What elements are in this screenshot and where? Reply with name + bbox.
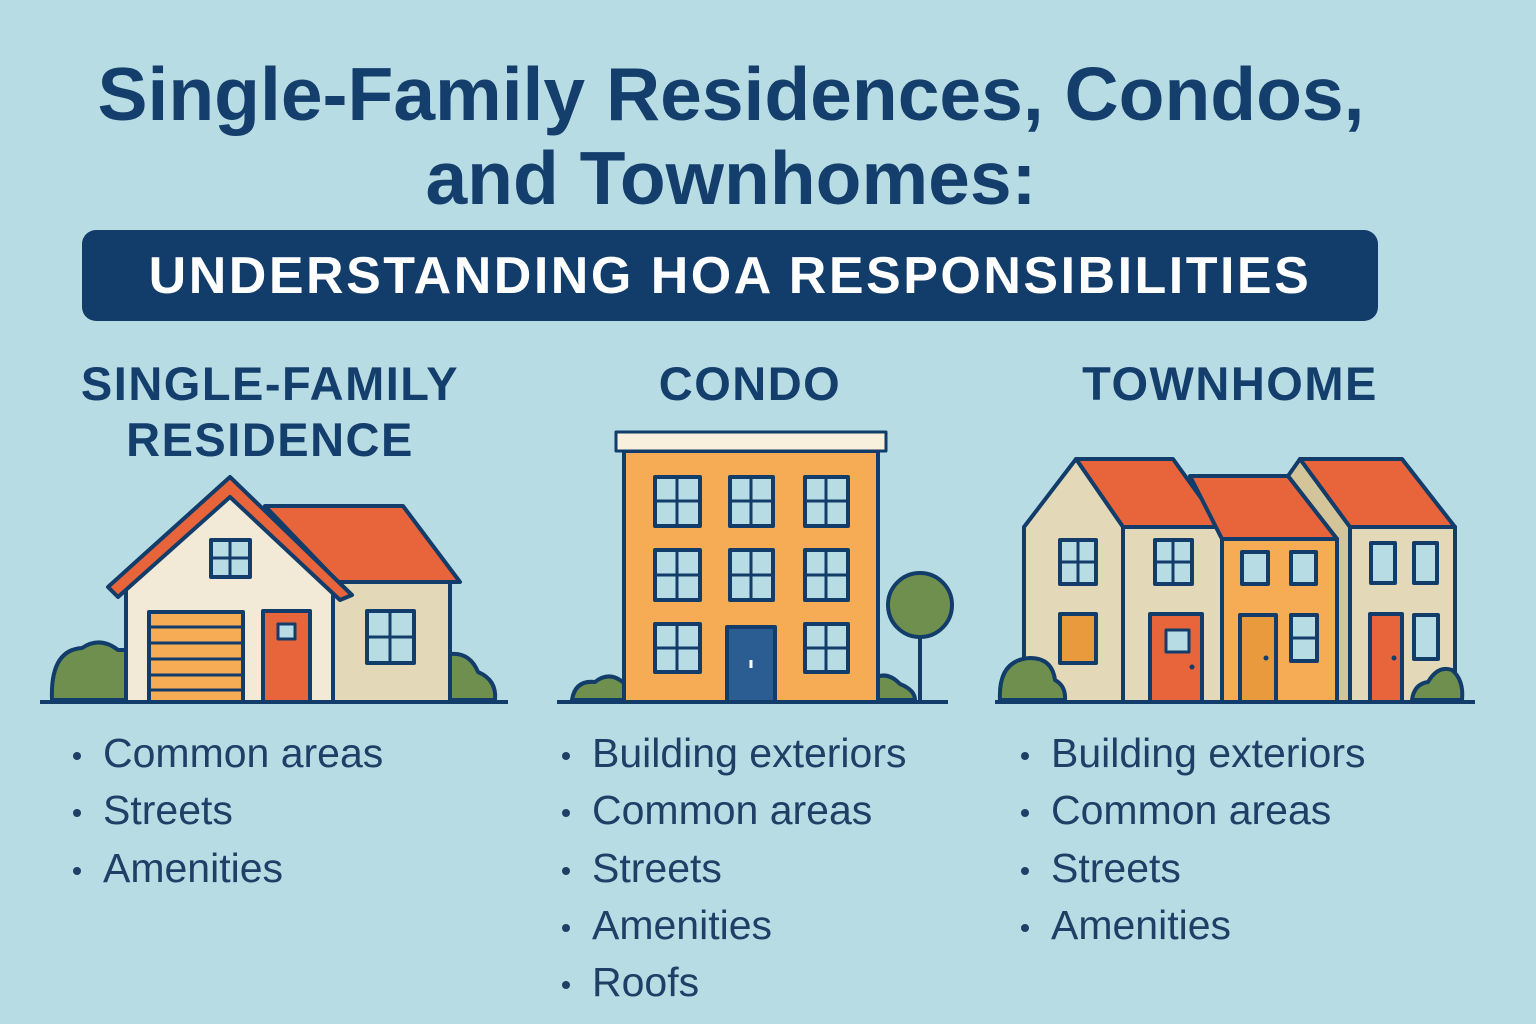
icon: condo building <box>557 432 952 702</box>
heading: condo: CONDO <box>659 357 841 410</box>
heading: townhome: TOWNHOME <box>1082 357 1378 410</box>
list: single-family: Amenities <box>103 845 283 891</box>
list: townhome: Common areas <box>1051 787 1331 833</box>
icon: single-family house <box>40 477 508 702</box>
list: townhome: Streets <box>1051 845 1181 891</box>
icon: townhomes <box>995 459 1475 702</box>
list: single-family: Streets <box>103 787 233 833</box>
banner: UNDERSTANDING HOA RESPONSIBILITIES <box>149 247 1311 305</box>
title: Single-Family Residences, Condos, <box>98 52 1364 136</box>
title <box>98 52 1364 220</box>
list: townhome: Building exteriors <box>1051 730 1366 776</box>
list: single-family <box>73 730 383 891</box>
list: condo <box>562 730 906 1005</box>
heading: single-family: SINGLE-FAMILY <box>81 357 459 410</box>
list: townhome <box>1021 730 1366 948</box>
list: condo: Amenities <box>592 902 772 948</box>
list: condo: Streets <box>592 845 722 891</box>
list: condo: Roofs <box>592 959 699 1005</box>
list: townhome: Amenities <box>1051 902 1231 948</box>
banner <box>82 230 1378 321</box>
title: and Townhomes: <box>425 136 1037 220</box>
list: single-family: Common areas <box>103 730 383 776</box>
heading: single-family <box>81 357 459 466</box>
list: condo: Common areas <box>592 787 872 833</box>
list: condo: Building exteriors <box>592 730 906 776</box>
heading: single-family: RESIDENCE <box>126 413 414 466</box>
